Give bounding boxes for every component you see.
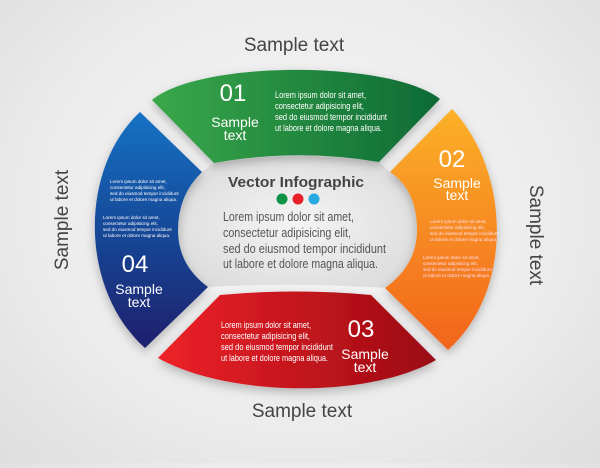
panel: 04 blue: sed do eiusmod tempor incididunt (110, 191, 179, 196)
panel: 03 red: text (354, 359, 376, 375)
panel: 04 blue: 04 (122, 251, 148, 278)
panel: 04 blue: Lorem ipsum dolor sit amet, (103, 215, 160, 220)
panel: 02 orange: Lorem ipsum dolor sit amet, (430, 219, 487, 224)
panel: 04 blue: Sample (115, 281, 163, 297)
panel: 02 orange: text (446, 187, 468, 203)
panel: 04 blue (95, 112, 208, 348)
panel: 02 orange (385, 109, 499, 350)
panel: 02 orange: 02 (439, 146, 465, 173)
panel: 03 red: ut labore et dolore magna aliqua. (221, 353, 328, 363)
panel: 03 red: consectetur adipisicing elit, (221, 331, 310, 341)
center text: ut labore et dolore magna aliqua. (223, 257, 378, 271)
panel: 01 green: consectetur adipisicing elit, (275, 101, 364, 111)
center title: Vector Infographic (228, 174, 364, 191)
panel: 02 orange: ut labore et dolore magna aliqua. (430, 237, 497, 242)
panel: 02 orange: Sample (433, 175, 481, 191)
panel: 02 orange: consectetur adipisicing elit, (423, 261, 478, 266)
panel: 04 blue: ut labore et dolore magna aliqua. (103, 233, 170, 238)
dots (276, 194, 320, 204)
panel: 02 orange: ut labore et dolore magna aliqua. (423, 273, 490, 278)
label right: Sample text (525, 185, 546, 286)
center text: consectetur adipisicing elit, (223, 226, 351, 240)
panel: 02 orange: sed do eiusmod tempor incididunt (423, 267, 492, 272)
panel: 03 red: Sample (341, 346, 389, 362)
panel: 01 green: 01 (220, 80, 246, 107)
panel: 04 blue: sed do eiusmod tempor incididunt (103, 227, 172, 232)
label bottom: Sample text (252, 401, 353, 422)
panel: 01 green: Lorem ipsum dolor sit amet, (275, 90, 366, 100)
label left: Sample text (52, 169, 73, 270)
panel: 01 green: text (224, 127, 246, 143)
panel: 02 orange: sed do eiusmod tempor incididunt (430, 231, 499, 236)
panel: 04 blue: consectetur adipisicing elit, (110, 185, 165, 190)
center background (178, 156, 417, 288)
panel: 01 green: sed do eiusmod tempor incididunt (275, 112, 387, 122)
panel: 03 red (158, 292, 436, 388)
panel: 04 blue: consectetur adipisicing elit, (103, 221, 158, 226)
panel: 03 red: 03 (348, 316, 374, 343)
panel: 03 red: Lorem ipsum dolor sit amet, (221, 320, 311, 330)
panel: 03 red: sed do eiusmod tempor incididunt (221, 342, 333, 352)
panel: 01 green: ut labore et dolore magna aliqua. (275, 123, 382, 133)
panel: 02 orange: consectetur adipisicing elit, (430, 225, 485, 230)
panel: 01 green (152, 70, 440, 163)
panel: 04 blue: text (128, 294, 150, 310)
center text: Lorem ipsum dolor sit amet, (223, 210, 354, 224)
panel: 02 orange: Lorem ipsum dolor sit amet, (423, 255, 480, 260)
panel: 01 green: Sample (211, 114, 259, 130)
panel: 04 blue: Lorem ipsum dolor sit amet, (110, 179, 167, 184)
panel: 04 blue: ut labore et dolore magna aliqua. (110, 197, 177, 202)
label top: Sample text (244, 35, 345, 56)
center text: sed do eiusmod tempor incididunt (223, 242, 386, 256)
